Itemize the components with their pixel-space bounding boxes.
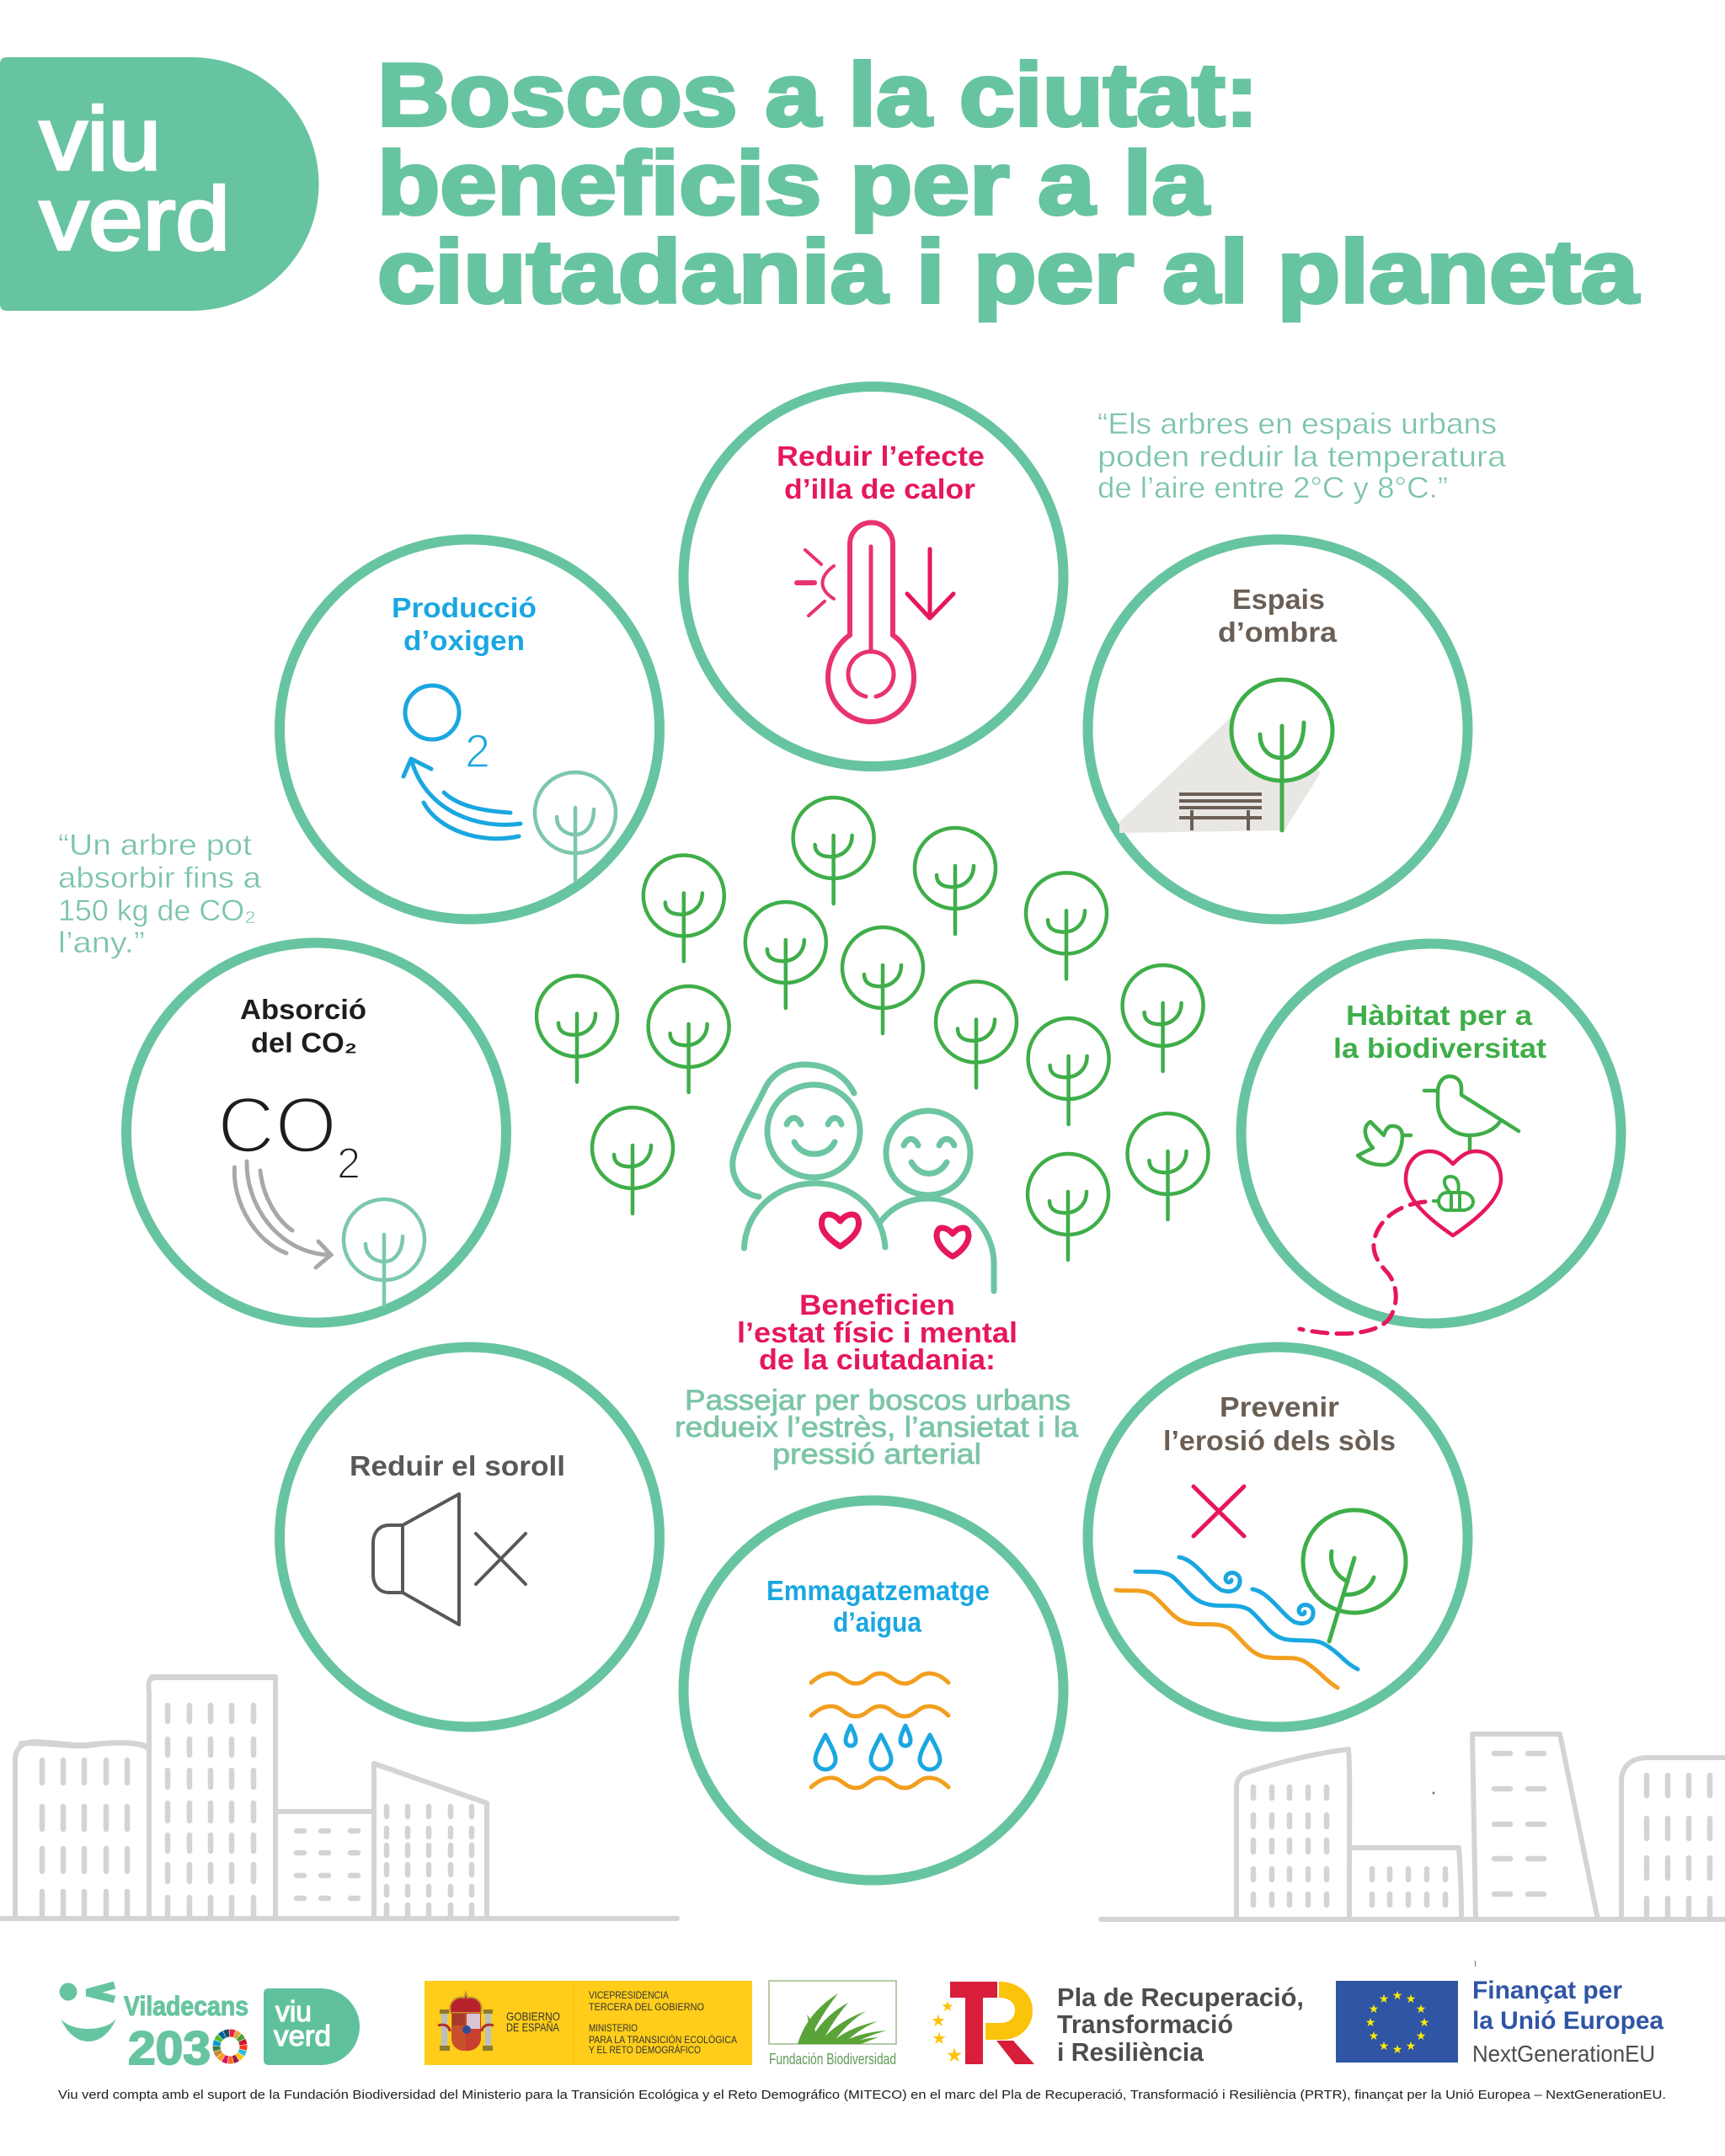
panel heading — [240, 994, 366, 1058]
quote: CO2 absorption: 150 kg de CO₂ — [58, 894, 256, 927]
icon: CO2 with arrows and tree: 2 — [337, 1139, 360, 1188]
icon: leaning tree — [1303, 1510, 1406, 1641]
footer logo: EU flag: ★ — [1419, 2015, 1429, 2029]
footer logo: Gobierno de España: TERCERA DEL GOBIERNO — [589, 2001, 704, 2013]
icon: large bird — [1424, 1076, 1519, 1151]
footer logo: Gobierno de España: VICEPRESIDENCIA — [589, 1989, 669, 2001]
quote: CO2 absorption: absorbir fins a — [58, 862, 262, 894]
panel heading — [1218, 584, 1338, 648]
text block: benefits heading — [737, 1289, 1017, 1376]
icon: dashed flight path — [1300, 1202, 1425, 1334]
title: ciutadania i per al planeta — [377, 222, 1639, 322]
footer text: EU funding: Finançat per — [1472, 1977, 1622, 2004]
panel: absorció del CO2 — [126, 943, 506, 1322]
panel heading: la biodiversitat — [1333, 1033, 1546, 1064]
footer text: EU funding: la Unió Europea — [1472, 2007, 1664, 2035]
icon: SDG ring — [216, 2033, 243, 2060]
text block: benefits description: redueix l’estrès, l’ansietat i la — [675, 1412, 1078, 1444]
panel heading: Producció — [392, 592, 537, 623]
footer logo: EU flag: ★ — [1392, 2042, 1402, 2056]
footer logo: Plan de Recuperación TR: Transformació — [1057, 2009, 1233, 2039]
footer logo: EU flag: ★ — [1365, 2015, 1375, 2029]
text block: benefits description: Passejar per boscos urbans — [685, 1385, 1071, 1417]
panel heading: del CO₂ — [251, 1027, 357, 1058]
quote: temperature: “Els arbres en espais urbans — [1097, 408, 1497, 440]
panel: prevenir l'erosió dels sòls — [1088, 1348, 1467, 1726]
logo: viu verd: verd — [40, 169, 230, 269]
footer logo: Gobierno de España: DE ESPAÑA — [506, 2020, 560, 2034]
panel heading — [1333, 1000, 1546, 1064]
panel heading: Reduir el soroll — [350, 1450, 565, 1481]
footer logo: EU flag: ★ — [1416, 2029, 1426, 2042]
quote: temperature: de l’aire entre 2°C y 8°C.” — [1097, 472, 1448, 504]
footer logo: viu verd small: viu — [275, 1996, 312, 2028]
icon: shade — [1119, 716, 1321, 833]
forest of trees — [537, 798, 1208, 1260]
icon: coat of arms — [438, 1993, 494, 2051]
icon: heart large — [822, 1214, 859, 1246]
icon: O2 with arrows and tree: 2 — [465, 724, 490, 777]
panel: reduir el soroll — [280, 1348, 660, 1726]
footer logo: Viladecans 2030: Viladecans — [124, 1991, 248, 2021]
panel: hàbitat per a la biodiversitat — [1242, 943, 1621, 1334]
icon: heart — [1406, 1151, 1501, 1235]
man — [881, 1111, 994, 1291]
footer logo: EU flag: ★ — [1416, 2002, 1426, 2015]
text block: benefits description — [675, 1385, 1078, 1470]
footer logo: EU flag: ★ — [1406, 1992, 1416, 2005]
footer logo: EU flag: ★ — [1369, 2002, 1379, 2015]
icon: bee — [1434, 1177, 1473, 1210]
footer logo: Fundación Biodiversidad — [769, 1981, 896, 2068]
panel heading: Hàbitat per a — [1346, 1000, 1533, 1031]
panel heading — [1163, 1391, 1396, 1456]
panel heading: d’ombra — [1218, 616, 1338, 648]
panel heading — [777, 440, 985, 504]
panel heading: Reduir l’efecte — [777, 440, 985, 472]
panel heading: d’aigua — [833, 1607, 922, 1637]
footer logo: Gobierno de España — [425, 1981, 752, 2065]
icon: small bird — [1358, 1122, 1411, 1165]
icon: water layers and drops — [811, 1673, 948, 1788]
footer logo: EU flag — [1336, 1981, 1458, 2063]
footer logo: viu verd small — [264, 1988, 360, 2065]
icon: CO2 with arrows and tree — [217, 1081, 425, 1305]
icon: muted speaker — [373, 1494, 526, 1625]
footer logo: Gobierno de España: Y EL RETO DEMOGRÁFICO — [589, 2043, 701, 2056]
woman — [733, 1065, 885, 1248]
icon: CO2 with arrows and tree: CO — [217, 1081, 337, 1169]
text block: benefits heading: l’estat físic i mental — [737, 1317, 1017, 1349]
footer logo: Viladecans 2030 — [59, 1983, 248, 2074]
panel: reduir l'efecte d'illa de calor — [684, 387, 1063, 766]
footer logo: Gobierno de España: GOBIERNO — [506, 2009, 560, 2023]
quote: CO2 absorption: “Un arbre pot — [58, 829, 252, 862]
illustration: city right — [1101, 1734, 1725, 1919]
icon: wind and soil lines — [1116, 1557, 1358, 1688]
quote: temperature — [1097, 408, 1507, 504]
footer logo: EU flag: ★ — [1379, 2039, 1389, 2052]
icon: tree — [1231, 680, 1332, 830]
title — [377, 45, 1639, 322]
logo: viu verd: viu — [40, 89, 161, 189]
footer text: EU funding — [1472, 1961, 1664, 2067]
footer credit line: Viu verd compta amb el suport de la Fundación Biodiversidad del Ministerio para la Transición Ecológica y el Reto Demográfico (MITECO) en el marc del Pla de Recuperació, Transformació i Resiliència (PRTR), finançat per la Unió Europea – NextGenerationEU. — [58, 2088, 1666, 2102]
panel heading: d’illa de calor — [784, 473, 975, 504]
title: Boscos a la ciutat: — [377, 45, 1258, 145]
quote: temperature: poden reduir la temperatura — [1097, 440, 1507, 473]
panel heading: l’erosió dels sòls — [1163, 1425, 1396, 1456]
footer logo: Gobierno de España: MINISTERIO — [589, 2022, 638, 2034]
footer text: EU funding: NextGenerationEU — [1472, 2041, 1655, 2067]
panel heading: Emmagatzematge — [766, 1575, 990, 1606]
logo: viu verd — [0, 57, 319, 311]
quote: CO2 absorption — [58, 829, 262, 959]
panel heading — [392, 592, 537, 656]
icon: thermometer with sun and down arrow — [797, 522, 953, 722]
illustration: smiling people with hearts — [733, 1065, 994, 1291]
panel heading: Espais — [1232, 584, 1325, 615]
text block: benefits heading: de la ciutadania: — [759, 1344, 996, 1376]
footer logo: Plan de Recuperación TR: ★ — [946, 2044, 963, 2066]
footer logo: Viladecans 2030: 203 — [128, 2021, 211, 2074]
footer logo: Plan de Recuperación TR: ★ — [932, 2030, 947, 2048]
quote: CO2 absorption: l’any.” — [58, 926, 145, 959]
footer logo: Plan de Recuperación TR: ★ — [931, 2012, 946, 2031]
footer logo: viu verd small: verd — [274, 2020, 331, 2052]
icon: heart small — [937, 1228, 969, 1257]
illustration: city left — [0, 1677, 677, 1919]
footer logo: Plan de Recuperación TR — [931, 1982, 1304, 2067]
text block: benefits heading: Beneficien — [799, 1289, 955, 1321]
footer logo: EU flag: ★ — [1369, 2029, 1379, 2042]
icon: O2 with arrows and tree — [403, 686, 616, 880]
footer logo: EU flag: ★ — [1392, 1988, 1402, 2002]
icon: grass — [798, 1993, 887, 2044]
panel heading — [766, 1575, 990, 1637]
panel heading: Prevenir — [1220, 1391, 1339, 1422]
footer logo: Gobierno de España: PARA LA TRANSICIÓN ECOLÓGICA — [589, 2033, 737, 2046]
panel: producció d'oxigen — [280, 539, 660, 920]
icon: bench — [1179, 794, 1262, 830]
footer logo: EU flag: ★ — [1406, 2039, 1416, 2052]
panel heading: Absorció — [240, 994, 366, 1025]
footer logo: Plan de Recuperación TR: Pla de Recuperació, — [1057, 1983, 1304, 2012]
panel: emmagatzematge d'aigua — [684, 1501, 1063, 1880]
text block: benefits description: pressió arterial — [772, 1438, 981, 1470]
footer logo: Plan de Recuperación TR: i Resiliència — [1057, 2037, 1204, 2067]
icon: red cross — [1194, 1486, 1244, 1536]
footer logo: EU flag: ★ — [1379, 1992, 1389, 2005]
footer logo: Fundación Biodiversidad: Fundación Biodiversidad — [769, 2051, 896, 2068]
panel: espais d'ombra — [1088, 539, 1467, 920]
panel heading: d’oxigen — [403, 625, 525, 656]
footer logo: Plan de Recuperación TR: ★ — [941, 1999, 954, 2015]
title: beneficis per a la — [377, 134, 1210, 233]
